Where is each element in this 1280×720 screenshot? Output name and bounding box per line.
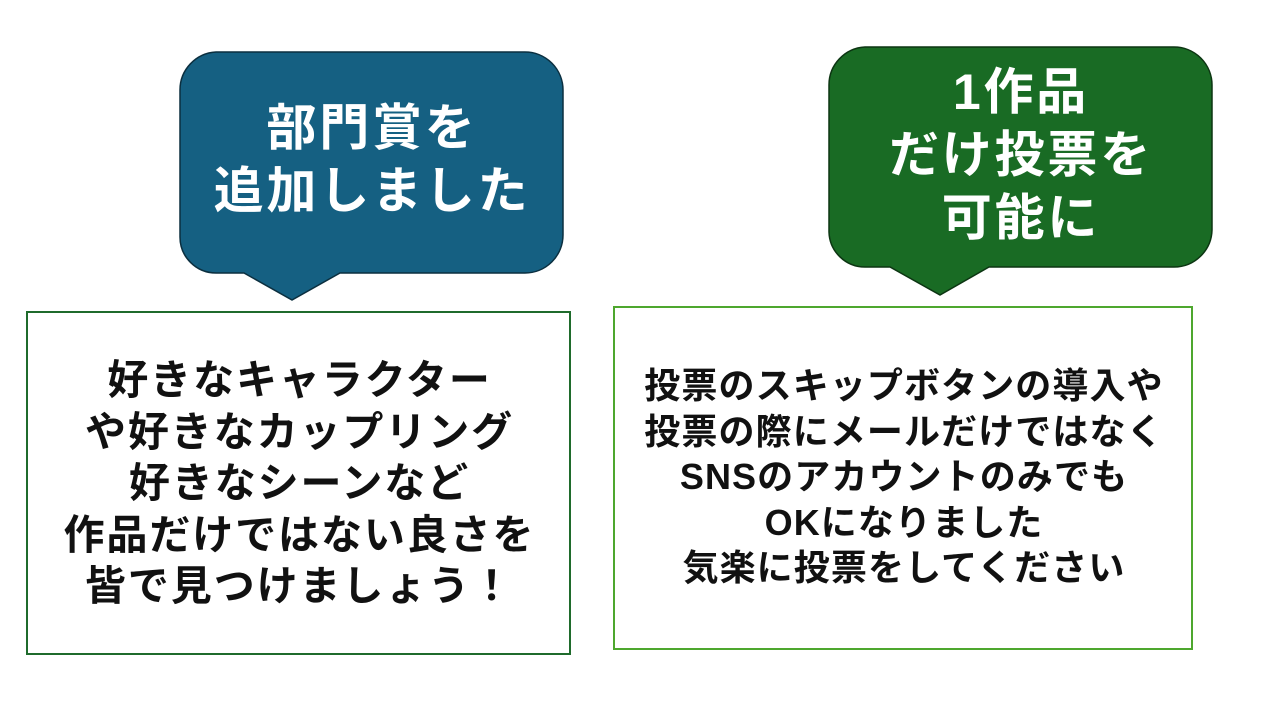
text block: left description: 好きなキャラクター [107,357,492,403]
text block: left description [64,357,535,609]
panel: left text box [26,311,571,655]
heading: green bubble text: だけ投票を [889,127,1153,183]
panel: right text box [613,306,1193,650]
text block: left description: 作品だけではない良さを [64,512,535,558]
heading: green bubble text: 可能に [942,190,1100,246]
text block: right description: 気楽に投票をしてください [682,547,1126,588]
text block: right description [644,365,1164,588]
text block: right description: OKになりました [765,502,1043,542]
heading: green bubble text: 1作品 [953,64,1089,120]
text block: right description: 投票の際にメールだけではなく [644,410,1164,452]
heading: green bubble text [889,64,1153,246]
heading: blue bubble text [214,100,530,219]
heading: blue bubble text: 部門賞を [266,100,478,156]
callout: green speech bubble [828,46,1213,296]
text block: left description: や好きなカップリング [85,408,514,454]
callout: blue speech bubble [179,51,564,301]
text block: right description: SNSのアカウントのみでも [680,456,1128,497]
heading: blue bubble text: 追加しました [214,163,530,219]
text block: right description: 投票のスキップボタンの導入や [644,365,1164,406]
text block: left description: 好きなシーンなど [129,460,470,506]
text block: left description: 皆で見つけましょう！ [85,563,514,609]
